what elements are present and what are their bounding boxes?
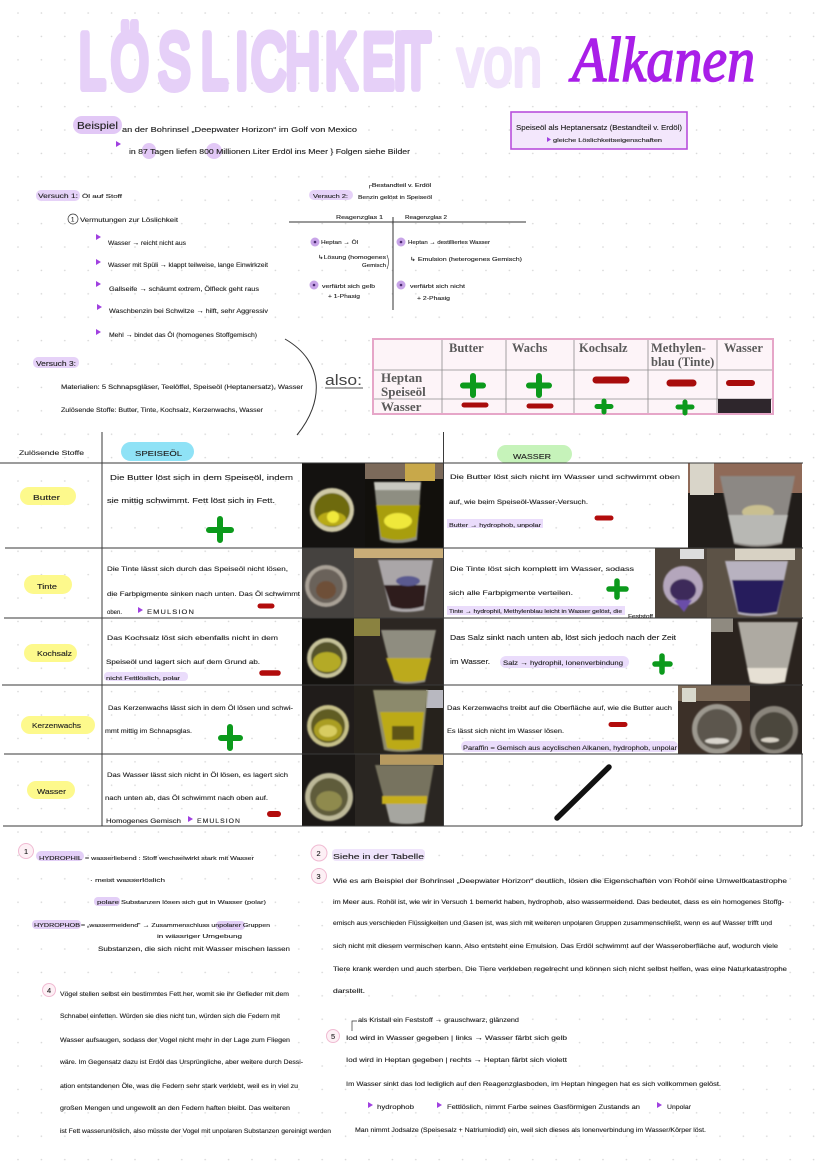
intro example text: an der Bohrinsel „Deepwater Horizon“ im Golf von Mexico <box>122 125 357 134</box>
cell text: Wasser Speiseöl: EMULSION <box>197 818 241 825</box>
panel: Versuch 1: Wasser → reicht nicht aus <box>108 240 187 247</box>
panel: Versuch 2: ↳ Emulsion (heterogenes Gemisch) <box>410 256 522 263</box>
panel: question 4 text <box>42 984 331 1135</box>
panel: Versuch 1: Waschbenzin bei Schwitze → hilft, sehr Aggressiv <box>109 308 269 315</box>
cell text: Butter Wasser: auf, wie beim Speiseöl-Wasser-Versuch. <box>449 499 588 506</box>
photo: Wasser in Speiseöl, top <box>302 754 355 826</box>
photo: Kerzenwachs in Speiseöl, side <box>354 685 444 754</box>
panel: Versuch 2: Benzin gelöst in Speiseöl <box>358 195 432 201</box>
table header labels: Zulösende Stoffe <box>19 450 84 457</box>
cell text: Kochsalz Speiseöl: nicht Fettlöslich, polar <box>106 676 180 682</box>
panel: summary table: Wasser <box>381 399 422 414</box>
intro example text <box>73 116 411 159</box>
panel: Versuch 2: Versuch 2: <box>313 194 349 200</box>
panel: Versuch 2: Heptan → Öl <box>321 239 358 246</box>
cell text: Kochsalz Wasser <box>450 633 676 672</box>
photo: Butter in Speiseöl, side <box>365 463 444 548</box>
photo: Kochsalz in Wasser, side <box>711 618 802 685</box>
cell text: Kerzenwachs Wasser: Das Kerzenwachs treibt auf die Oberfläche auf, wie die Butter auch <box>447 705 672 712</box>
panel: Versuch 1: Öl auf Stoff <box>82 193 123 200</box>
cell text: Kochsalz Wasser: im Wasser. <box>450 657 490 666</box>
panel: question 3 text: sich nicht mit diesem vermischen kann. Also entsteht eine Emulsion. Das Erdöl schwimmt auf der Wasseroberfläche auf, wodurch viele <box>333 943 778 950</box>
panel: question 1 definitions: = „wassermeidend“ → Zusammenschluss unpolarer Gruppen <box>81 923 270 929</box>
cell text: Wasser Speiseöl: Das Wasser lässt sich nicht in Öl lösen, es lagert sich <box>107 771 288 779</box>
panel: Versuch 3: Zulösende Stoffe: Butter, Tinte, Kochsalz, Kerzenwachs, Wasser <box>61 407 264 414</box>
photo: Kerzenwachs in Wasser, side <box>750 685 802 754</box>
row label pills: Butter <box>33 493 61 502</box>
photo: Kerzenwachs in Wasser, top <box>678 685 750 754</box>
panel: Versuch 1: Mehl → bindet das Öl (homogenes Stoffgemisch) <box>109 331 257 339</box>
panel: question 3 text: emisch aus verschieden Flüssigkeiten und Gasen ist, was sich mit weiteren unpolaren Gruppen zusammenschließt, wenn es auf Wasser trifft und <box>333 920 772 927</box>
cell text: Butter Wasser: Die Butter löst sich nicht im Wasser und schwimmt oben <box>450 474 680 481</box>
cell text: Wasser Speiseöl: nach unten ab, das Öl schwimmt nach oben auf. <box>105 794 268 802</box>
callout: Speiseöl als Heptanersatz: gleiche Löslichkeitseigenschaften <box>553 138 662 144</box>
panel: Versuch 2: verfärbt sich gelb <box>322 284 375 290</box>
photo: Butter in Speiseöl, top <box>302 463 365 548</box>
panel: Versuch 2: Heptan → destilliertes Wasser <box>408 240 490 246</box>
photo: Tinte in Speiseöl, top <box>302 548 354 618</box>
panel: question 1 definitions: = wasserliebend : Stoff wechselwirkt stark mit Wasser <box>85 856 254 862</box>
panel: question 3 text <box>312 868 787 995</box>
panel: question 4 text: wäre. Im Gegensatz dazu ist Erdöl das Ursprüngliche, aber weitere durch Dessi- <box>59 1059 303 1066</box>
panel: summary table: Wasser <box>724 341 763 355</box>
panel: Versuch 3: Versuch 3: <box>36 359 76 368</box>
photo: Tinte in Wasser, side <box>707 548 802 618</box>
photo: Kochsalz in Speiseöl, side <box>354 618 444 685</box>
panel: question 3 text: Wie es am Beispiel der Bohrinsel „Deepwater Horizon“ deutlich, lösen die Eigenschaften von Rohöl eine Umweltkatastrophe <box>333 878 787 885</box>
panel: Versuch 3 <box>33 357 304 414</box>
panel: question 1 definitions: HYDROPHOB <box>34 923 80 929</box>
panel: summary table: Speiseöl <box>381 384 426 399</box>
photo: Tinte in Speiseöl, side <box>354 548 444 618</box>
cell text: Tinte Wasser: Tinte → hydrophil, Methylenblau leicht in Wasser gelöst, die <box>449 609 622 615</box>
panel: question 5 text: hydrophob <box>377 1104 414 1111</box>
cell text: Tinte Wasser: sich alle Farbpigmente verteilen. <box>449 590 573 597</box>
photo: Butter in Wasser, side <box>688 463 802 548</box>
callout: Speiseöl als Heptanersatz <box>511 112 687 149</box>
panel: Versuch 1: Wasser mit Spüli → klappt teilweise, lange Einwirkzeit <box>108 262 268 269</box>
cell text: Butter Wasser <box>447 474 680 529</box>
panel: question 5 text: Man nimmt Jodsalze (Speisesalz + Natriumiodid) ein, weil sich dieses als Ionenverbindung im Wasser/Körper löst. <box>355 1127 706 1134</box>
cell text: Butter Speiseöl: sie mittig schwimmt. Fett löst sich in Fett. <box>107 496 275 505</box>
photo: Kerzenwachs in Speiseöl, top <box>302 685 354 754</box>
panel: question 1 definitions: HYDROPHIL <box>39 856 82 862</box>
cell text: Kerzenwachs Speiseöl: Das Kerzenwachs lässt sich in dem Öl lösen und schwi- <box>108 704 293 712</box>
title: von <box>457 23 542 101</box>
table header labels: WASSER <box>513 452 551 461</box>
panel: question 4 text: ation entstandenen Öle, was die Federn sehr stark verklebt, weil es in viel zu <box>60 1082 298 1090</box>
table header labels: SPEISEÖL <box>135 449 182 458</box>
panel: Versuch 1: Gallseife → schäumt extrem, Ölfleck geht raus <box>109 285 260 293</box>
row label pills: Kochsalz <box>37 649 72 658</box>
row label pills <box>20 487 95 799</box>
panel: question 5 text: Fettlöslich, nimmt Farbe seines Gasförmigen Zustands an <box>447 1104 640 1111</box>
panel: Versuch 1: Vermutungen zur Löslichkeit <box>80 217 178 224</box>
panel: Versuch 2: ↳Lösung (homogenes <box>318 254 386 261</box>
intro example text: Beispiel <box>77 121 118 132</box>
cell text: Tinte Wasser <box>447 566 654 620</box>
photo: Tinte in Wasser, top <box>655 548 707 618</box>
panel: question 5 text <box>326 1017 721 1134</box>
panel: question 3 text: Tiere krank werden und auch sterben. Die Tiere verkleben regelrecht und können sich nicht selbst helfen, was eine Naturkatastrophe <box>333 966 787 973</box>
cell text: Kerzenwachs Speiseöl <box>105 704 293 748</box>
title: Alkanen <box>569 24 755 95</box>
panel: Versuch 1: 1 <box>71 218 75 224</box>
panel: question 2: Siehe in der Tabelle <box>333 852 424 861</box>
panel: summary table: Wachs <box>512 341 548 355</box>
cell text: Tinte Speiseöl <box>107 566 300 616</box>
cell text: Kerzenwachs Wasser <box>447 705 678 752</box>
row label pills: Kerzenwachs <box>32 721 81 730</box>
panel: Versuch 1: Versuch 1: <box>38 193 78 200</box>
panel: question 5 text: Iod wird in Wasser gegeben | links → Wasser färbt sich gelb <box>346 1035 567 1042</box>
table marks <box>463 376 771 413</box>
panel: question 5 text: Im Wasser sinkt das Iod lediglich auf den Reagenzglasboden, im Heptan hingegen hat es sich vollkommen gelöst. <box>346 1081 721 1088</box>
cell text: Kerzenwachs Wasser: Paraffin = Gemisch aus acyclischen Alkanen, hydrophob, unpolar <box>463 745 678 752</box>
panel: question 1 definitions: in wässriger Umgebung <box>157 934 242 940</box>
panel: question 2 <box>311 845 425 861</box>
panel: question 5 text: Iod wird in Heptan gegeben | rechts → Heptan färbt sich violett <box>346 1057 567 1064</box>
callout: Speiseöl als Heptanersatz: Speiseöl als Heptanersatz (Bestandteil v. Erdöl) <box>516 123 682 132</box>
panel: summary table <box>373 339 773 414</box>
arrow: bracket to conclusion <box>285 339 316 435</box>
panel: experiment table <box>0 432 803 826</box>
panel: summary table: Methylen- <box>651 341 706 355</box>
panel: Versuch 2: + 2-Phasig <box>417 296 450 302</box>
panel: Versuch 2: Gemisch <box>362 263 386 269</box>
panel: question 1 definitions: Substanzen, die sich nicht mit Wasser mischen lassen <box>98 946 290 953</box>
panel: Versuch 2: verfärbt sich nicht <box>410 284 466 290</box>
cell text: Butter Speiseöl: Die Butter löst sich in dem Speiseöl, indem <box>110 473 293 482</box>
panel: question 4 text: großen Mengen und ungewollt an den Federn haften bleibt. Das weiteren <box>60 1105 290 1112</box>
panel: question 3 text: 3 <box>316 872 321 881</box>
cell text: Wasser Speiseöl <box>105 771 288 825</box>
cell text: Wasser Speiseöl: Homogenes Gemisch <box>106 818 181 825</box>
panel: question 4 text: Wasser aufsaugen, sodass der Vogel nicht mehr in der Lage zum Fliegen <box>60 1037 290 1044</box>
row label pills: Tinte <box>37 582 57 591</box>
cell text: Tinte Wasser: Feststoff <box>628 614 654 620</box>
title: LÖSLICHKEIT <box>79 17 431 105</box>
label: also: also: <box>325 372 362 389</box>
photo: Wasser in Speiseöl, side <box>355 754 444 826</box>
panel: question 3 text: darstellt. <box>333 988 365 995</box>
table header labels <box>19 442 572 463</box>
panel: Versuch 1 <box>36 190 269 339</box>
panel: summary table: blau (Tinte) <box>651 355 714 369</box>
cell text: Kochsalz Speiseöl <box>104 635 279 682</box>
cell text: Kerzenwachs Speiseöl: mmt mittig im Schnapsglas. <box>105 728 192 735</box>
cell text: Tinte Speiseöl: EMULSION <box>147 609 195 616</box>
panel: question 4 text: Schnabel einfetten. Würden sie dies nicht tun, würden sich die Federn mit <box>60 1013 280 1020</box>
panel: question 1 definitions: 1 <box>24 847 28 856</box>
panel: summary table: Butter <box>449 341 484 355</box>
panel: Versuch 2: Reagenzglas 1 <box>336 215 383 221</box>
panel: question 3 text: im Meer aus. Rohöl ist, wie wir in Versuch 1 bemerkt haben, hydrophob, also wassermeidend. Das bedeutet, dass es ein homogenes Stoffg- <box>333 899 784 906</box>
intro example text: in 87 Tagen liefen 800 Millionen Liter Erdöl ins Meer } Folgen siehe Bilder <box>129 147 411 156</box>
panel: question 1 definitions: polare <box>97 900 119 906</box>
cell text: Kochsalz Wasser: Das Salz sinkt nach unten ab, löst sich jedoch nach der Zeit <box>450 633 676 642</box>
panel: Versuch 2: + 1-Phasig <box>328 294 360 300</box>
cell text: Tinte Speiseöl: die Farbpigmente sinken nach unten. Das Öl schwimmt <box>107 590 300 598</box>
cell text: Tinte Speiseöl: Die Tinte lässt sich durch das Speiseöl nicht lösen, <box>107 566 288 573</box>
panel: question 5 text: 5 <box>331 1032 335 1041</box>
panel: summary table: Heptan <box>381 370 423 385</box>
panel: question 4 text: ist Fett wasserunlöslich, also müsste der Vogel mit unpolaren Substanzen gereinigt werden <box>60 1128 331 1135</box>
panel: question 1 definitions <box>18 844 290 953</box>
diagonal strike: empty cell <box>557 767 609 818</box>
panel: question 2: 2 <box>316 849 321 858</box>
panel: Versuch 2: ┌Bestandteil v. Erdöl <box>367 183 431 189</box>
cell text: Kochsalz Wasser: Salz → hydrophil, Ionenverbindung <box>503 660 623 667</box>
cell text: Butter Wasser: Butter → hydrophob, unpolar <box>449 523 541 529</box>
cell text: Kochsalz Speiseöl: Speiseöl und lagert sich auf dem Grund ab. <box>106 659 260 666</box>
cell text: Kerzenwachs Wasser: Es lässt sich nicht im Wasser lösen. <box>447 728 564 735</box>
panel: question 4 text: Vögel stellen selbst ein bestimmtes Fett her, womit sie ihr Gefieder mit dem <box>60 991 290 998</box>
panel: question 1 definitions: · meist wasserlöslich <box>90 878 165 884</box>
row label pills: Wasser <box>37 787 67 796</box>
panel: summary table: Kochsalz <box>579 341 628 355</box>
panel: question 5 text: als Kristall ein Feststoff → grauschwarz, glänzend <box>358 1017 519 1024</box>
photo: Kochsalz in Speiseöl, top <box>302 618 354 685</box>
panel: Versuch 2: Reagenzglas 2 <box>405 215 447 221</box>
panel: question 4 text: 4 <box>47 986 51 995</box>
panel: Versuch 3: Materialien: 5 Schnapsgläser, Teelöffel, Speiseöl (Heptanersatz), Wasser <box>61 384 304 391</box>
cell text: Kochsalz Speiseöl: Das Kochsalz löst sich ebenfalls nicht in dem <box>107 635 279 642</box>
panel: question 5 text: Unpolar <box>667 1104 692 1111</box>
panel: question 1 definitions: Substanzen lösen sich gut in Wasser (polar) <box>121 900 266 906</box>
cell text: Tinte Wasser: Die Tinte löst sich komplett im Wasser, sodass <box>450 566 635 573</box>
title <box>79 17 755 105</box>
table grid lines <box>0 432 803 826</box>
panel: Versuch 2 <box>289 183 526 310</box>
cell text: Tinte Speiseöl: oben. <box>107 609 122 616</box>
cell text: Butter Speiseöl <box>107 473 293 540</box>
